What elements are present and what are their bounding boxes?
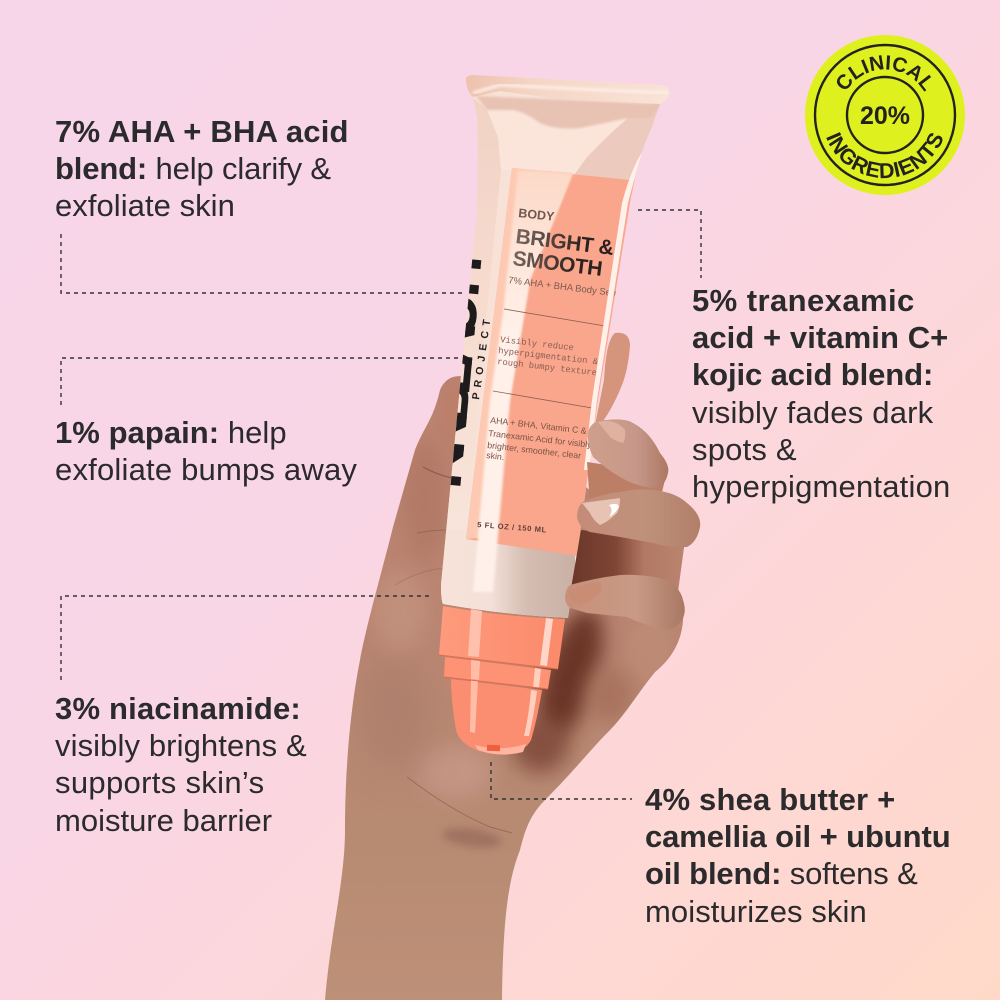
label: pale left strip [466,168,573,539]
tube: cap middle ring [444,657,551,689]
text block: shea butter blend: moisturizes skin [645,894,867,929]
tube: description text: AHA + BHA, Vitamin C & [490,415,587,436]
text block: tranexamic acid blend: kojic acid blend: [692,357,933,392]
badge: clinical ingredients 20% [805,35,965,195]
tube: benefit text: rough bumpy texture [497,357,597,378]
text block: AHA + BHA acid blend: 7% AHA + BHA acid [55,114,349,149]
index fingernail [598,421,625,443]
text block: tranexamic acid blend: 5% tranexamic [692,283,915,318]
tube: product name text: BRIGHT & [514,225,615,260]
tube: body [441,75,670,618]
tube: cap collar [439,606,565,669]
tube: description text [486,415,593,462]
tube: nozzle [451,679,542,754]
tube: crimp band [466,75,669,104]
tube: product name text: BODY [518,206,556,224]
label: vertical highlight [473,170,573,592]
text block: niacinamide: moisture barrier [55,803,272,838]
text block: shea butter blend: 4% shea butter + [645,782,895,817]
tube: right edge highlight [584,152,642,470]
tube: nozzle highlights [470,680,537,755]
text block: papain: 1% papain: help [55,415,287,450]
badge: clinical ingredients 20%: INGREDIENTS [826,132,942,178]
tube: size text: 5 FL OZ / 150 ML [477,520,547,534]
text block: tranexamic acid blend: hyperpigmentation [692,469,950,504]
tube: pale highlight under crimp [578,118,628,170]
tube: shadow band under crimp [476,96,662,128]
callout line: AHA + BHA [61,234,466,293]
hand: palm and wrist [325,376,683,1000]
callout line: papain [61,358,460,405]
tube: label rules [493,309,605,408]
hand: ring finger [565,575,685,630]
text block: AHA + BHA acid blend [55,114,349,223]
text block: niacinamide [55,691,307,838]
tube: description text: skin. [486,450,505,462]
text block: papain [55,415,357,487]
badge: clinical ingredients 20%: 20% [860,102,910,130]
callout line: niacinamide [61,596,430,680]
text block: tranexamic acid blend: spots & [692,432,797,467]
tube: description text: brighter, smoother, clear [487,440,582,461]
text block: tranexamic acid blend: visibly fades dark [692,395,933,430]
badge: clinical ingredients 20%: CLINICAL [836,55,931,92]
middle fingernail [582,498,620,525]
tube: lower unlabelled section [441,530,575,618]
text block: AHA + BHA acid blend: blend: help clarify & [55,151,331,186]
tube: benefit text: Visibly reduce [500,335,574,353]
hand: index finger [588,419,668,488]
text block: AHA + BHA acid blend: exfoliate skin [55,188,235,223]
ring fingernail [568,582,601,605]
text block: tranexamic acid blend [692,283,950,504]
tube: benefit text [498,336,598,376]
tube: benefit text: hyperpigmentation & [498,346,599,367]
text block: tranexamic acid blend: acid + vitamin C+ [692,320,948,355]
tube: vertical brand name [450,259,490,486]
text block: shea butter blend: camellia oil + ubuntu [645,819,951,854]
hand: middle finger [577,489,700,547]
tube: label [466,168,640,592]
text block: niacinamide: supports skin’s [55,765,264,800]
text block: niacinamide: visibly brightens & [55,728,307,763]
text block: shea butter blend [645,782,951,929]
tube: upper right shading [574,100,660,184]
text block: niacinamide: 3% niacinamide: [55,691,301,726]
hand: area between middle and ring fingers [569,530,685,600]
tube: product name text [509,208,616,296]
hand: area between index and middle fingers [587,462,665,505]
text block: papain: exfoliate bumps away [55,452,357,487]
tube: vertical brand name: KINBEAUTY [405,236,497,491]
callout line: tranexamic acid [638,210,701,278]
hand: thumb behind tube [595,333,630,425]
tube: product name text: SMOOTH [511,247,603,281]
callout line: shea butter [491,762,632,799]
text block: shea butter blend: oil blend: softens & [645,856,918,891]
tube: product name text: 7% AHA + BHA Body Serum [508,275,628,301]
brand: project wordmark: PROJECT [470,314,494,400]
tube: description text: Tranexamic Acid for visibly [488,428,593,450]
tube: upper left strip [446,98,501,530]
